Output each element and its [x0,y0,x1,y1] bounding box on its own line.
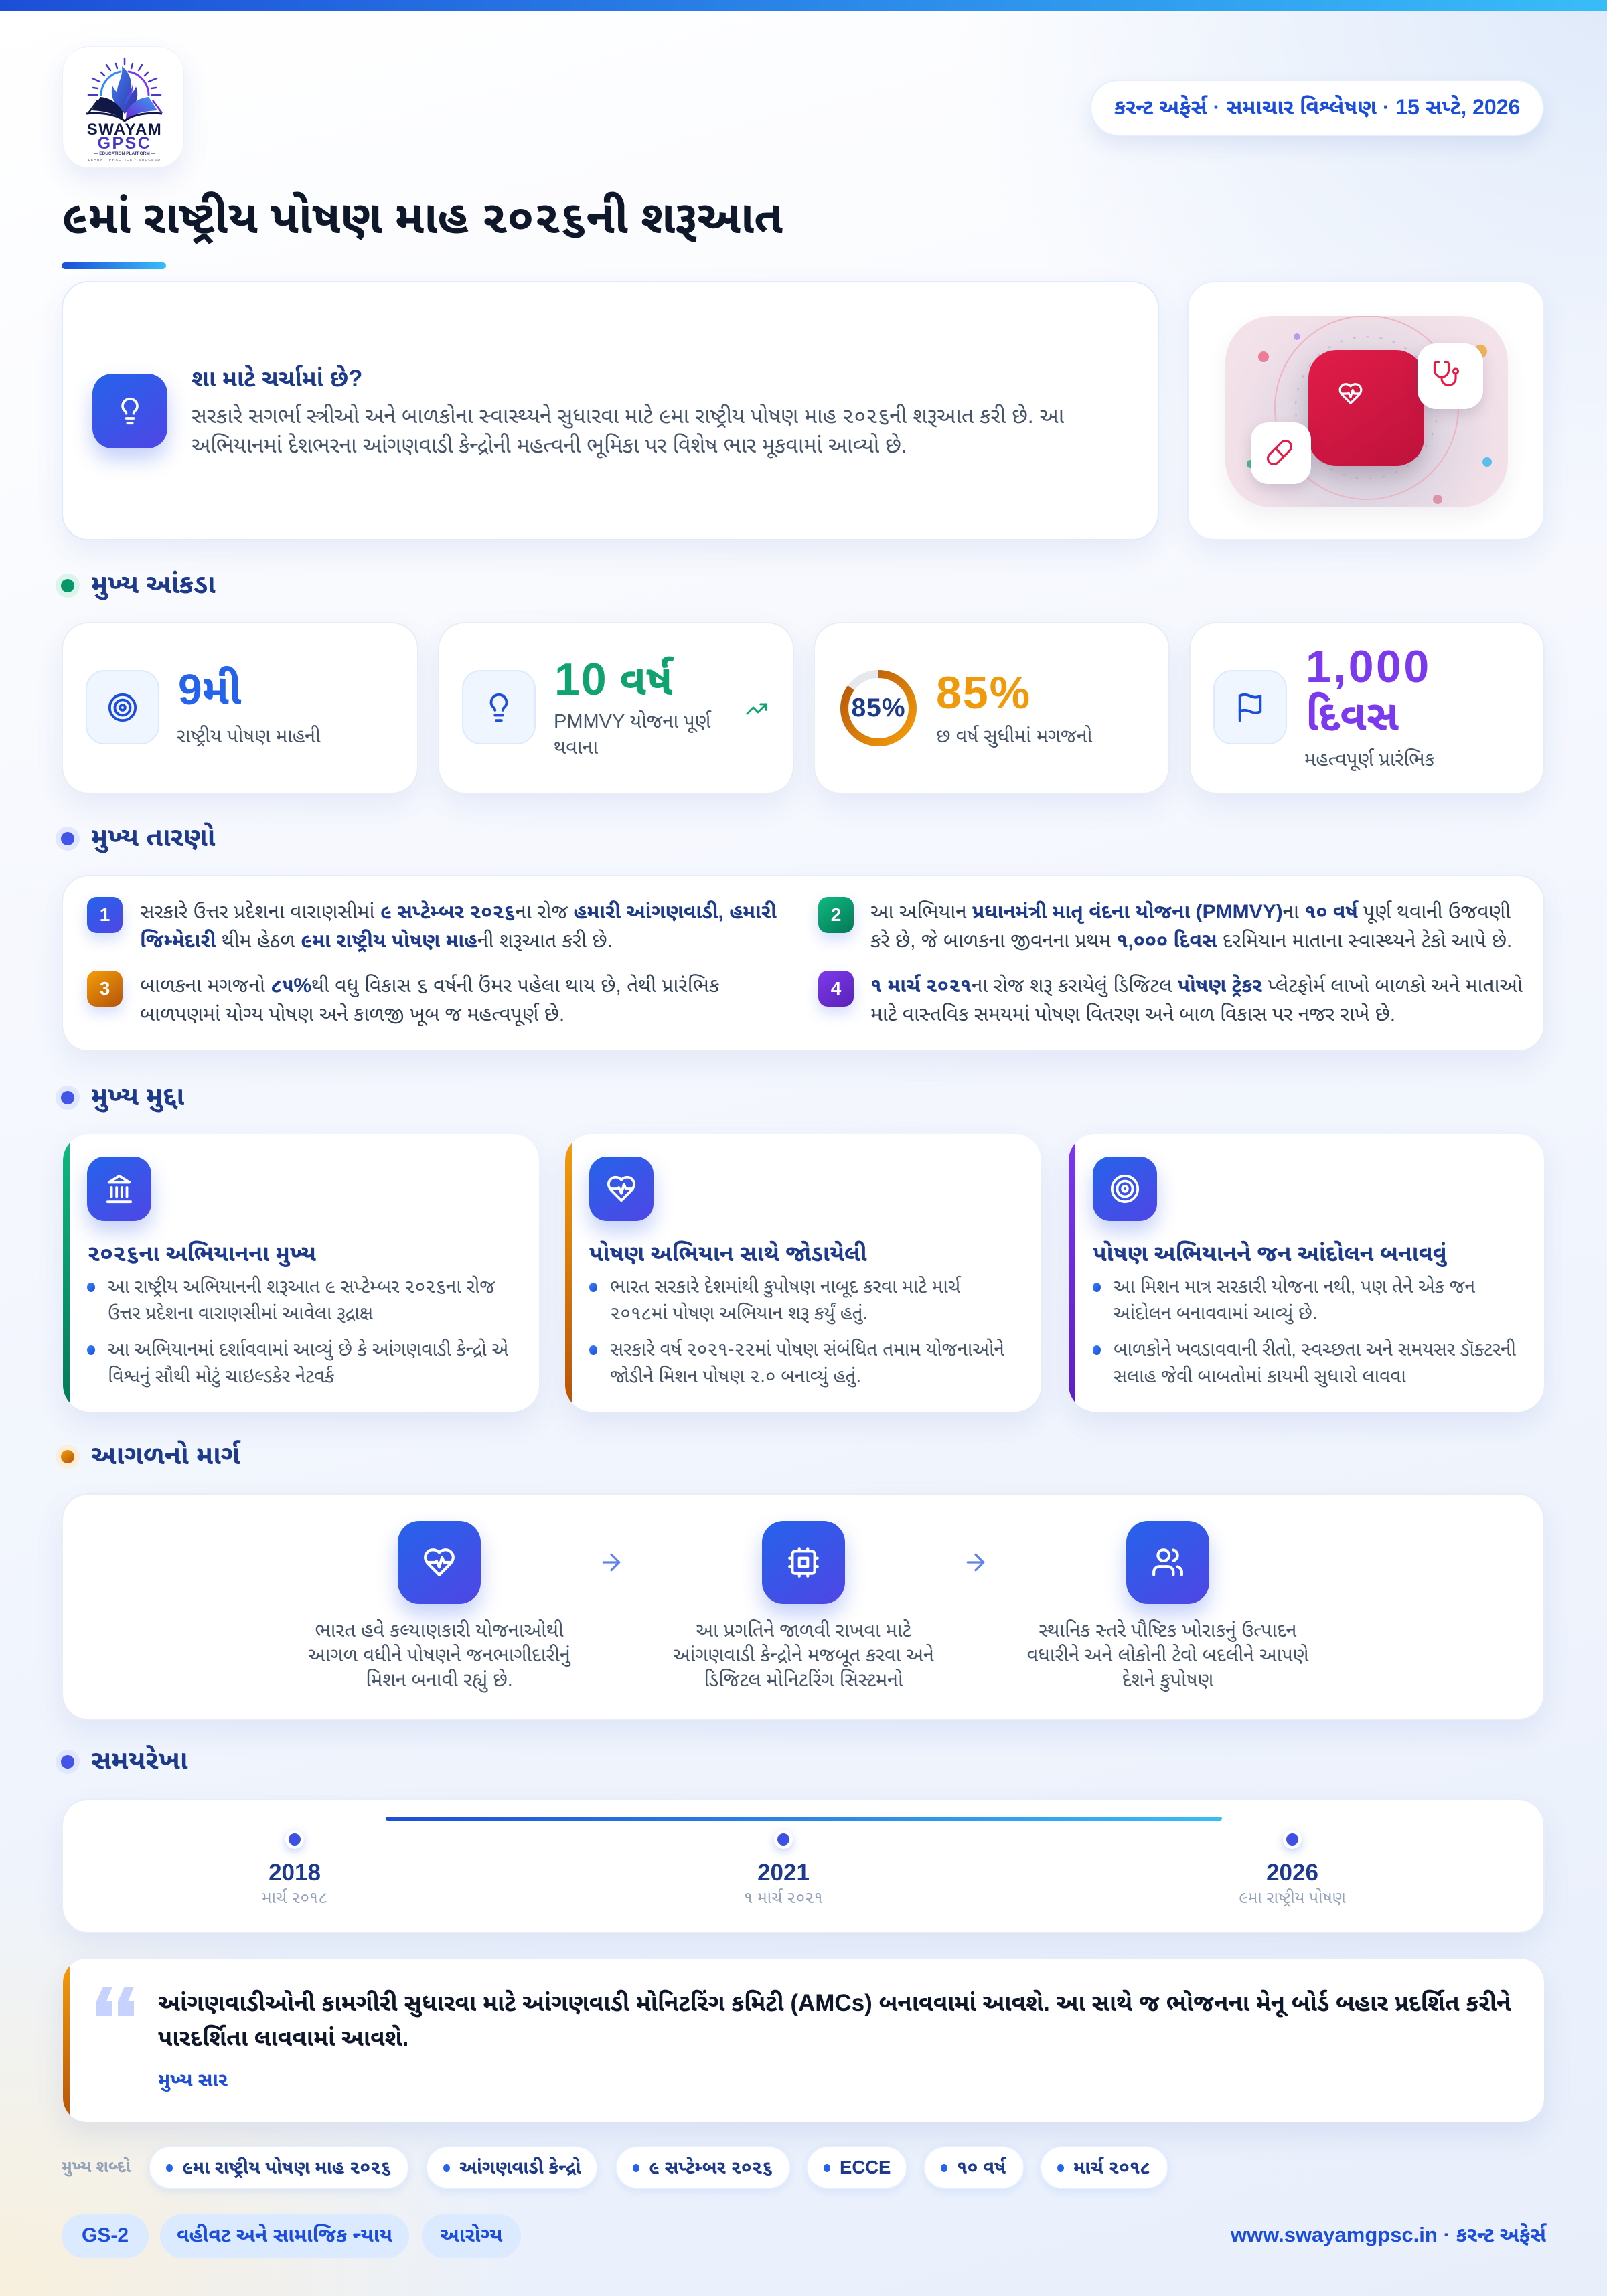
issue bullets: વિશ્વનું સૌથી મોટું ચાઇલ્ડકેર નેટવર્ક [108,1366,334,1386]
step 2 text: આંગણવાડી કેન્દ્રોને મજબૂત કરવા અને [673,1645,934,1666]
panel: illustration [1187,281,1545,540]
icon: heart pulse [589,1157,654,1221]
finding 3: બાળપણમાં યોગ્ય પોષણ અને કાળજી ખૂબ જ મહત્વપૂર્ણ છે. [140,1003,564,1026]
issue title: પોષણ અભિયાન સાથે જોડાયેલી [589,1241,867,1266]
date pill [1090,80,1544,136]
finding 1: સરકારે ઉત્તર પ્રદેશના વારાણસીમાં ૯ સપ્ટેમ્બર ૨૦૨૬ના રોજ હમારી આંગણવાડી, હમારી [140,901,777,923]
badge 4: 4 [831,978,841,999]
finding 1 [140,900,777,952]
why text [192,404,1064,458]
quote source: મુખ્ય સાર [158,2070,228,2091]
stat card: 10 years [438,622,794,794]
label: મહત્વપૂર્ણ પ્રારંભિક [1304,749,1434,770]
year 2021: 2021 [757,1860,810,1886]
value: દિવસ [1306,691,1399,740]
badge 4 [818,971,854,1007]
step 3 text: દેશને કુપોષણ [1122,1669,1213,1691]
tag: GS-2: GS-2 [82,2224,129,2246]
logo: — EDUCATION PLATFORM — [94,151,156,156]
badge 2: 2 [831,904,841,925]
heading: key figures: મુખ્ય આંકડા [91,570,216,599]
step 3 icon [1126,1521,1209,1604]
chip [1040,2146,1168,2189]
step 3 text: સ્થાનિક સ્તરે પૌષ્ટિક ખોરાકનું ઉત્પાદન [1039,1620,1296,1641]
arrow 1 [603,1553,620,1572]
issue title: પોષણ અભિયાનને જન આંદોલન બનાવવું [1093,1241,1447,1266]
heading: timeline: સમયરેખા [91,1746,188,1775]
issue title: ૨૦૨૬ના અભિયાનના મુખ્ય [87,1241,316,1266]
icon: target [86,670,159,744]
chip: ECCE [840,2157,891,2178]
logo: SWAYAM [87,120,162,139]
chip [149,2146,409,2189]
year 2018: 2018 [269,1860,321,1886]
icon: target [1093,1157,1157,1221]
icon: landmark [87,1157,151,1221]
issue bullets: ઉત્તર પ્રદેશના વારાણસીમાં આવેલા રૂદ્રાક્ષ [108,1303,373,1323]
step 1 text [308,1619,570,1692]
badge 1: 1 [100,904,110,925]
heading: key issues: મુખ્ય મુદ્દા [91,1082,184,1111]
quote text: આંગણવાડીઓની કામગીરી સુધારવા માટે આંગણવાડી મોનિટરિંગ કમિટી (AMCs) બનાવવામાં આવશે. આ સાથે જ ભોજનના મેનૂ બોર્ડ બહાર પ્રદર્શિત કરીને [158,1990,1511,2016]
logo [62,46,184,168]
issue bullets [87,1276,508,1387]
step 1 text: મિશન બનાવી રહ્યું છે. [366,1669,513,1691]
chip [426,2146,598,2189]
chip: ૯ સપ્ટેમ્બર ૨૦૨૬ [649,2157,773,2178]
chip [806,2146,907,2189]
why text: અભિયાનમાં દેશભરના આંગણવાડી કેન્દ્રોની મહત્વની ભૂમિકા પર વિશેષ ભાર મૂકવામાં આવ્યો છે. [192,433,907,457]
label: થવાના [554,737,598,758]
issue bullets: બાળકોને ખવડાવવાની રીતો, સ્વચ્છતા અને સમયસર ડૉક્ટરની [1114,1339,1516,1360]
step 3 text [1026,1619,1309,1692]
arrow 2 [967,1553,984,1572]
illustration: health icons [1225,316,1508,515]
finding 2 [870,900,1512,952]
issue card 1 [63,1134,539,1412]
heading: key issues [56,1082,185,1113]
step 2 text: આ પ્રગતિને જાળવી રાખવા માટે [696,1620,911,1641]
top gradient bar [0,0,1607,11]
panel: key findings [62,875,1545,1052]
tag: health [422,2214,521,2258]
value: 9મી [178,665,242,714]
title: ૯માં રાષ્ટ્રીય પોષણ માહ ૨૦૨૬ની શરૂઆત [62,191,783,243]
tag: governance [160,2214,409,2258]
step 1 text: ભારત હવે કલ્યાણકારી યોજનાઓથી [315,1620,564,1641]
issue bullets [1093,1276,1516,1387]
label [554,710,712,758]
badge 3 [87,971,123,1007]
issue bullets: આંદોલન બનાવવામાં આવ્યું છે. [1114,1303,1317,1323]
issue bullets: આ મિશન માત્ર સરકારી યોજના નથી, પણ તેને એક જન [1114,1276,1475,1297]
label: PMMVY યોજના પૂર્ણ [554,711,710,732]
step 1 icon [398,1521,481,1604]
panel: key quote [63,1959,1544,2122]
heading: way forward: આગળનો માર્ગ [91,1441,240,1470]
value: 85% [936,667,1031,718]
finding 1: જિમ્મેદારી થીમ હેઠળ ૯મા રાષ્ટ્રીય પોષણ માહની શરૂઆત કરી છે. [140,930,613,952]
panel: why in news [62,281,1159,540]
icon: lightbulb [92,374,167,448]
quote text [158,1989,1511,2051]
year 2026: 2026 [1266,1860,1318,1886]
why heading: શા માટે ચર્ચામાં છે? [192,365,362,392]
logo: GPSC [98,134,151,153]
quote mark [96,1987,134,2016]
chip: ૧૦ વર્ષ [957,2157,1006,2178]
finding 3: બાળકના મગજનો ૮૫%થી વધુ વિકાસ ૬ વર્ષની ઉંમર પહેલા થાય છે, તેથી પ્રારંભિક [140,975,719,997]
donut chart: 85% [851,693,906,722]
issue bullets: આ રાષ્ટ્રીય અભિયાનની શરૂઆત ૯ સપ્ટેમ્બર ૨૦૨૬ના રોજ [108,1276,495,1297]
footer credit: www.swayamgpsc.in · કરન્ટ અફેર્સ [1231,2223,1546,2246]
issue card 3 [1069,1134,1544,1412]
tag: governance: વહીવટ અને સામાજિક ન્યાય [177,2224,392,2246]
chip [923,2146,1024,2189]
finding 2: આ અભિયાન પ્રધાનમંત્રી માતૃ વંદના યોજના (PMMVY)ના ૧૦ વર્ષ પૂર્ણ થવાની ઉજવણી [870,901,1511,923]
finding 4 [870,974,1523,1026]
chip: ૯મા રાષ્ટ્રીય પોષણ માહ ૨૦૨૬ [182,2157,391,2178]
node 2018 [285,1830,304,1849]
step 1 text: આગળ વધીને પોષણને જનભાગીદારીનું [308,1645,570,1666]
timeline bar [386,1817,1222,1821]
title underline [62,262,166,269]
donut chart [840,670,917,746]
badge 2 [818,897,854,933]
tag: GS-2 [62,2214,149,2258]
label: છ વર્ષ સુધીમાં મગજનો [936,726,1092,747]
badge 3: 3 [100,978,110,999]
tag: health: આરોગ્ય [441,2224,502,2246]
chip: માર્ચ ૨૦૧૮ [1073,2157,1150,2178]
sublabel 2021: ૧ માર્ચ ૨૦૨૧ [744,1889,823,1907]
icon: lightbulb [462,670,536,744]
finding 3 [140,974,719,1026]
step 2 text: ડિજિટલ મોનિટરિંગ સિસ્ટમનો [704,1669,903,1691]
node 2021 [774,1830,793,1849]
stat card: 85 percent [814,622,1170,794]
step 3 text: વધારીને અને લોકોની ટેવો બદલીને આપણે [1026,1645,1309,1666]
node 2026 [1283,1830,1302,1849]
issue bullets [589,1276,1004,1387]
panel: timeline [62,1799,1545,1933]
sublabel 2018: માર્ચ ૨૦૧૮ [262,1889,327,1907]
value: 1,000 [1306,641,1432,692]
heading: key findings: મુખ્ય તારણો [91,823,215,852]
sublabel 2026: ૯મા રાષ્ટ્રીય પોષણ [1239,1889,1346,1907]
finding 4: માટે વાસ્તવિક સમયમાં પોષણ વિતરણ અને બાળ વિકાસ પર નજર રાખે છે. [870,1003,1395,1026]
issue card 2 [565,1134,1041,1412]
finding 2: કરે છે, જે બાળકના જીવનના પ્રથમ ૧,૦૦૦ દિવસ દરમિયાન માતાના સ્વાસ્થ્યને ટેકો આપે છે. [870,930,1512,952]
issue bullets: ૨૦૧૮માં પોષણ અભિયાન શરૂ કર્યું હતું. [610,1303,868,1323]
value [1306,641,1432,740]
chip [615,2146,791,2189]
keywords label: મુખ્ય શબ્દો [62,2157,131,2176]
why text: સરકારે સગર્ભા સ્ત્રીઓ અને બાળકોના સ્વાસ્થ્યને સુધારવા માટે ૯મા રાષ્ટ્રીય પોષણ માહ ૨૦૨૬ની શરૂઆત કરી છે. આ [192,404,1064,428]
stat card: 1000 days [1189,622,1545,794]
step 2 icon [762,1521,845,1604]
issue bullets: આ અભિયાનમાં દર્શાવવામાં આવ્યું છે કે આંગણવાડી કેન્દ્રો એ [108,1339,508,1360]
logo: LEARN · PRACTICE · SUCCEED [88,158,161,162]
issue bullets: ભારત સરકારે દેશમાંથી કુપોષણ નાબૂદ કરવા માટે માર્ચ [610,1276,960,1297]
issue bullets: સરકારે વર્ષ ૨૦૨૧-૨૨માં પોષણ સંબંધિત તમામ યોજનાઓને [610,1339,1004,1360]
icon: flag [1213,670,1287,744]
quote text: પારદર્શિતા લાવવામાં આવશે. [158,2025,408,2051]
finding 4: ૧ માર્ચ ૨૦૨૧ના રોજ શરૂ કરાયેલું ડિજિટલ પોષણ ટ્રેકર પ્લેટફોર્મ લાખો બાળકો અને માતાઓ [870,975,1523,997]
stat card: 9th [62,622,418,794]
issue bullets: સલાહ જેવી બાબતોમાં કાયમી સુધારો લાવવા [1114,1366,1406,1386]
icon: trend up [746,703,767,715]
date pill: કરન્ટ અફેર્સ · સમાચાર વિશ્લેષણ · 15 સપ્ટે, 2026 [1114,95,1520,119]
issue bullets: જોડીને મિશન પોષણ ૨.૦ બનાવ્યું હતું. [610,1366,861,1386]
value: 10 વર્ષ [554,654,672,705]
badge 1 [87,897,123,933]
step 2 text [673,1619,934,1691]
label: રાષ્ટ્રીય પોષણ માહની [177,726,321,747]
chip: આંગણવાડી કેન્દ્રો [459,2157,581,2178]
panel: way forward [62,1493,1545,1720]
